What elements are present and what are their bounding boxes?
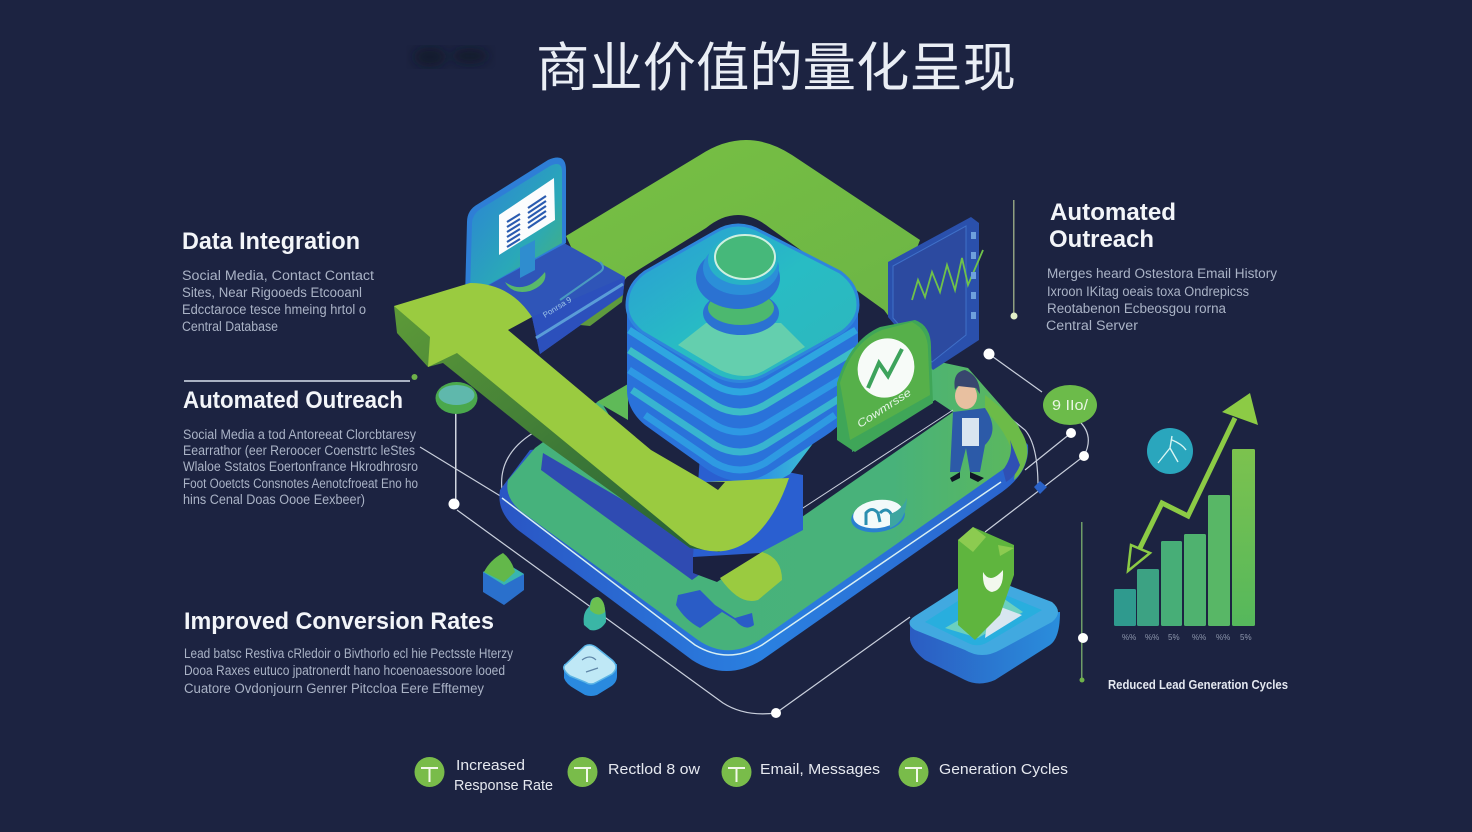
text block: data integration body: Social Media, Contact Contact <box>182 268 374 283</box>
bars <box>1114 449 1255 626</box>
lower knob <box>703 291 779 335</box>
white tile <box>945 596 1023 638</box>
logo bubble on platform <box>849 497 907 536</box>
tower <box>627 225 858 557</box>
lens icon with connector <box>436 382 478 510</box>
tower cap <box>627 225 858 382</box>
panel: automated outreach left text <box>183 374 418 507</box>
green speech bubble <box>1043 385 1097 425</box>
pedestal with green block <box>910 527 1060 684</box>
chart caption: Reduced Lead Generation Cycles <box>1108 677 1288 692</box>
heading: automated outreach right: Outreach <box>1049 226 1154 253</box>
indigo corner stripe <box>1003 440 1020 482</box>
right chart panel <box>888 217 983 370</box>
axis labels: 5% <box>1240 633 1252 642</box>
knob neck <box>696 247 780 309</box>
indigo arrow shadow band <box>541 453 720 580</box>
text block: data integration body: Sites, Near Rigooeds Etcooanl <box>182 285 362 300</box>
green messenger badge <box>837 320 933 452</box>
legend item: response rate: Response Rate <box>454 777 553 794</box>
text block: automated outreach body: Social Media a tod Antoreeat Clorcbtaresy <box>183 427 416 442</box>
icon: teal circle <box>1147 428 1193 474</box>
monitor <box>465 158 566 298</box>
monitor base plate: Ponrsa 9 <box>541 295 574 320</box>
green speech bubble: 9 IIo/ <box>1052 397 1089 414</box>
panel: data integration text <box>182 228 374 334</box>
legend item: email messages: Email, Messages <box>760 761 880 778</box>
right dark hole <box>600 380 953 548</box>
text block: data integration body: Central Database <box>182 319 278 334</box>
text block: outreach right body: Central Server <box>1046 318 1139 333</box>
tower stripes <box>629 330 856 470</box>
heading: automated outreach right <box>1049 199 1176 253</box>
text block: outreach right body <box>1046 266 1277 333</box>
text block: automated outreach body: Eearrathor (eer Reroocer Coenstrtc leStes <box>183 443 415 458</box>
axis labels: %% <box>1145 633 1159 642</box>
green messenger badge: Cowmrsse <box>855 387 914 431</box>
axis labels: 5% <box>1168 633 1180 642</box>
back green chevron arrow <box>566 140 920 318</box>
lime platform corner <box>985 395 1027 480</box>
heading: data integration: Data Integration <box>182 228 360 255</box>
text block: automated outreach body: Foot Ooetcts Consnotes Aenotcfroeat Eno ho <box>183 476 418 491</box>
lower dark gap <box>693 538 762 582</box>
pedestal <box>693 455 803 557</box>
legend item: generation cycles <box>898 757 1068 787</box>
icon: green drop <box>584 597 606 630</box>
title smudge <box>414 47 488 67</box>
title: 商业价值的量化呈现 <box>536 39 1016 98</box>
knob top <box>715 235 775 279</box>
arrow dark side <box>394 306 720 552</box>
platform blue rim <box>499 400 1028 671</box>
axis labels: %% <box>1192 633 1206 642</box>
text block: improved conversion body: Lead batsc Restiva cRledoir o Bivthorlo ecl hie Pectsste Hterzy <box>184 646 513 661</box>
lower right connector <box>1078 522 1088 682</box>
monitor base plate <box>465 243 625 354</box>
green back corner <box>597 384 628 420</box>
green block <box>958 527 1014 640</box>
text block: improved conversion body <box>184 646 513 696</box>
text block: automated outreach body <box>183 427 418 507</box>
big lime arrow <box>394 283 789 552</box>
legend item: generation cycles: Generation Cycles <box>939 761 1068 778</box>
platform green top <box>507 362 1022 650</box>
text block: data integration body <box>182 268 374 334</box>
panel: improved conversion rates text <box>184 608 513 696</box>
text block: outreach right body: Merges heard Ostestora Email History <box>1047 266 1277 281</box>
legend item: response rate <box>414 757 553 794</box>
footer legend <box>414 757 1068 794</box>
legend item: reduced: Rectlod 8 ow <box>608 761 700 778</box>
axis labels: %% <box>1122 633 1136 642</box>
text block: improved conversion body: Dooa Raxes eutuco jpatronerdt hano hcoenoaessoore looed <box>184 663 505 678</box>
person <box>950 370 992 482</box>
vertical connector <box>1010 200 1018 320</box>
tower skirt <box>630 385 858 485</box>
pedestal base <box>910 612 1060 684</box>
tower body <box>627 305 858 481</box>
bar chart <box>1108 393 1288 692</box>
legend item: email messages <box>722 757 880 787</box>
isometric platform <box>499 300 1028 671</box>
connector lines <box>420 354 1088 714</box>
text block: outreach right body: Reotabenon Ecbeosgou rorna <box>1047 301 1226 316</box>
small lime block and chair <box>676 552 782 628</box>
dark notch <box>706 482 725 490</box>
hole edge line <box>780 410 953 523</box>
trend arrow <box>1128 393 1258 571</box>
arrow lime top <box>394 283 789 551</box>
text block: improved conversion body: Cuatore Ovdonjourn Genrer Pitccloa Eere Efftemey <box>184 681 484 696</box>
icon: small cube <box>483 553 524 605</box>
legend item: reduced <box>568 757 700 787</box>
text block: outreach right body: Ixroon IKitag oeais toxa Ondrepicss <box>1047 284 1249 299</box>
heading: automated outreach: Automated Outreach <box>183 387 403 414</box>
text block: data integration body: Edcctaroce tesce hmeing hrtol o <box>182 302 366 317</box>
text block: automated outreach body: hins Cenal Doas Oooe Eexbeer) <box>183 492 365 507</box>
heading: automated outreach right: Automated <box>1050 199 1176 226</box>
divider with green dot <box>184 374 418 382</box>
platform hole <box>530 300 627 420</box>
pedestal inner <box>925 589 1042 645</box>
node dots <box>771 348 1089 718</box>
axis labels <box>1122 633 1252 642</box>
axis labels: %% <box>1216 633 1230 642</box>
icon: rounded cube <box>564 645 617 696</box>
text block: automated outreach body: Wlaloe Sstatos Eoertonfrance Hkrodhrosro <box>183 459 418 474</box>
platform inner line <box>502 482 1001 655</box>
light trapezoid <box>678 323 805 376</box>
pedestal top <box>910 578 1058 655</box>
panel: automated outreach right text <box>1010 199 1277 333</box>
heading: improved conversion rates: Improved Conversion Rates <box>184 608 494 635</box>
legend item: response rate: Increased <box>456 757 525 774</box>
